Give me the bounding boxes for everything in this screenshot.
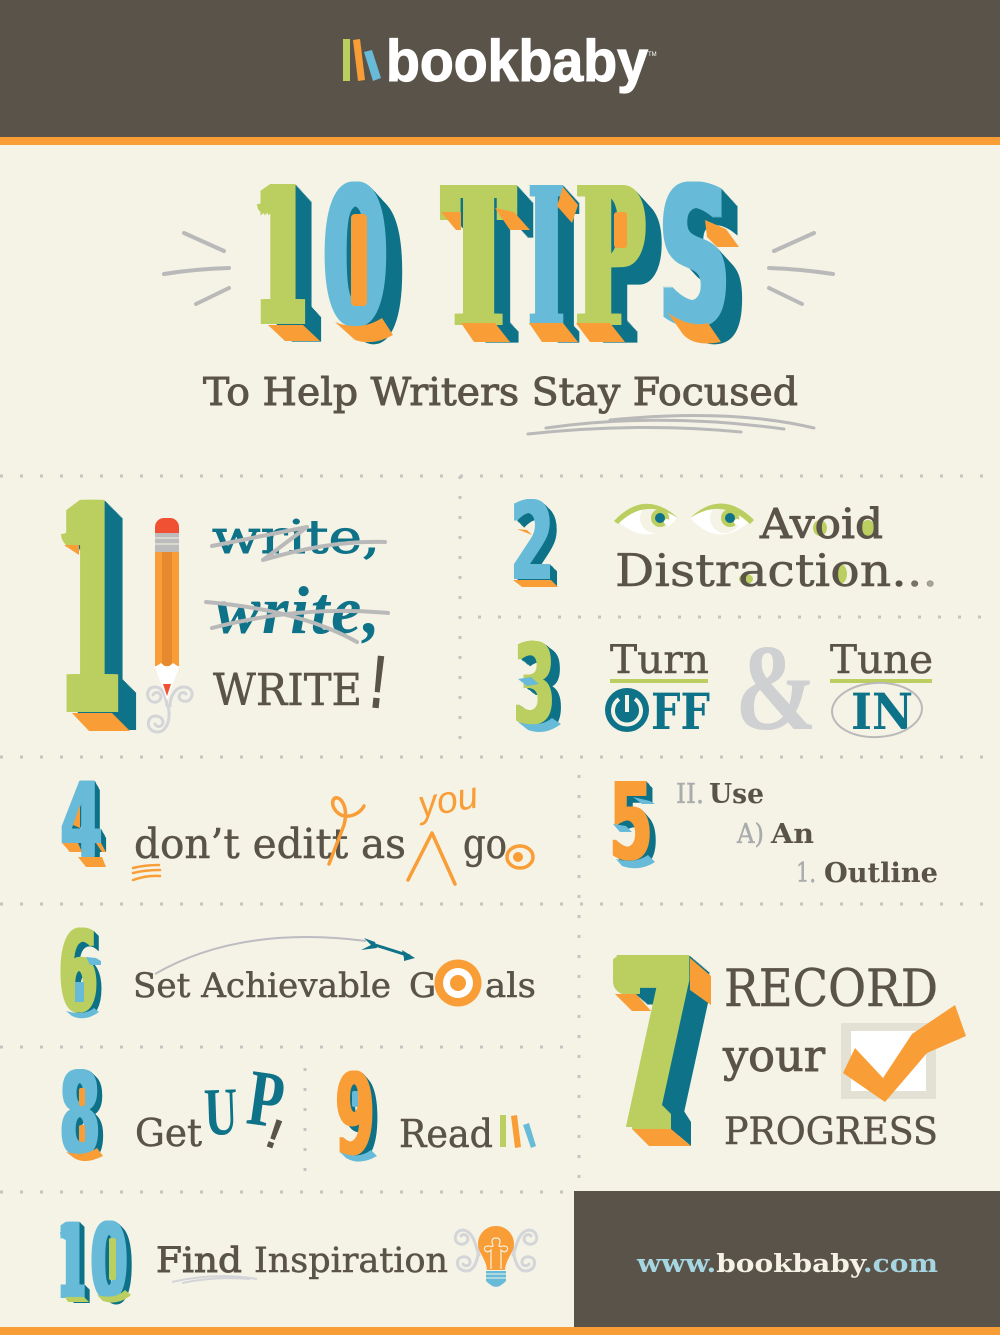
text: II. Use A) An 1. Outline: 1. xyxy=(796,858,816,889)
numeral 8 orange faces xyxy=(58,1068,108,1162)
title: 10 TIPS: P xyxy=(572,146,637,370)
numeral 10 xyxy=(56,1217,136,1307)
text: Inspiration: Inspiration xyxy=(254,1241,448,1281)
text: II. Use A) An 1. Outline: An xyxy=(770,819,814,850)
icon: checkbox with check xyxy=(840,1003,968,1103)
burst lines right of title xyxy=(767,230,835,306)
icon: target xyxy=(434,960,482,1006)
footer panel xyxy=(574,1191,1000,1327)
numeral 1 flag and orange faces xyxy=(61,532,130,731)
numeral 6 blue faces xyxy=(66,957,101,1018)
header band xyxy=(0,0,1000,145)
text: Set Achievable Goals xyxy=(133,966,536,1006)
numeral 3: 3 xyxy=(512,621,554,750)
text: Turn: Turn xyxy=(610,638,709,683)
icon: arrow arc xyxy=(154,936,415,975)
title: 10 TIPS xyxy=(254,146,742,370)
text: Set Achievable Goals: G xyxy=(409,966,436,1006)
icon: books xyxy=(498,1112,538,1150)
numeral 4: 4 xyxy=(59,760,101,882)
numeral 7 xyxy=(610,954,714,1149)
burst lines left of title xyxy=(162,230,231,306)
edit marks xyxy=(133,798,533,884)
text: your: your xyxy=(722,1031,826,1082)
icon: eyes xyxy=(614,504,754,534)
text: UP!: ! xyxy=(260,1109,289,1158)
text: WRITE! xyxy=(212,639,390,726)
footer orange bar xyxy=(0,1327,1000,1335)
text: II. Use A) An 1. Outline: Use xyxy=(709,779,764,810)
text: UP!: U xyxy=(203,1073,239,1150)
text: Find xyxy=(154,1240,262,1286)
text: Tune: Tune xyxy=(830,638,933,683)
icon: power button xyxy=(605,688,649,732)
text: Find: Find xyxy=(156,1241,242,1281)
text: don't edit as you go: go xyxy=(463,820,507,868)
text: II. Use A) An 1. Outline: A) xyxy=(736,819,764,850)
text: PROGRESS: PROGRESS xyxy=(724,1110,938,1153)
text: OFF: FF xyxy=(651,682,710,741)
icon: light bulb with swirls xyxy=(455,1222,539,1288)
text: IN circled: IN xyxy=(851,682,913,741)
title: 10 TIPS: S xyxy=(656,146,725,370)
numeral 9 xyxy=(334,1070,382,1164)
text: Get: Get xyxy=(135,1111,202,1155)
subtitle underline scribble xyxy=(526,414,816,436)
numeral 8: 8 xyxy=(58,1048,98,1180)
ampersand: & xyxy=(735,621,817,757)
text: Set Achievable Goals: als xyxy=(485,966,536,1006)
title: 10 TIPS: I xyxy=(527,146,554,370)
subtitle: To Help Writers Stay Focused xyxy=(203,370,798,414)
numeral 10 green faces xyxy=(56,1217,136,1307)
text: WRITE!: WRITE xyxy=(213,665,362,716)
numeral 1: 1 xyxy=(57,442,114,781)
title: 10 TIPS: 1 xyxy=(254,146,294,370)
text: WRITE!: ! xyxy=(366,639,390,726)
logo: bookbaby: bookbaby xyxy=(386,29,648,94)
title flag on the 1 xyxy=(257,204,264,213)
text: UP! xyxy=(205,1072,285,1147)
numeral 2: 2 xyxy=(509,480,553,605)
text: UP!: P xyxy=(242,1054,290,1146)
numeral 7: 7 xyxy=(609,908,688,1183)
text: write, (italic struck out): write, xyxy=(215,572,380,648)
numeral 9 blue faces xyxy=(334,1070,382,1164)
text: II. Use A) An 1. Outline: II. xyxy=(676,779,704,810)
numeral 9: 9 xyxy=(334,1051,373,1181)
text: write, (typewriter struck out): write, xyxy=(212,510,380,564)
text: Set Achievable Goals: Set Achievable xyxy=(133,966,391,1006)
numeral 5 blue faces xyxy=(613,797,655,868)
text: don't edit as you go: you xyxy=(412,775,481,827)
numeral 8 xyxy=(58,1068,108,1162)
text: Avoid: Avoid xyxy=(759,500,883,548)
title orange faces xyxy=(268,187,739,344)
title: 10 TIPS: T xyxy=(439,146,503,370)
text: Distraction...: Distraction. .. xyxy=(615,544,938,597)
text: RECORD: RECORD xyxy=(724,960,938,1019)
icon: pencil xyxy=(146,518,194,734)
title: 10 TIPS: 0 xyxy=(320,146,387,370)
text: don't edit as you go xyxy=(132,775,535,886)
numeral 4 orange faces xyxy=(62,805,106,867)
website url: www. bookbaby .com xyxy=(636,1249,938,1278)
numeral 5: 5 xyxy=(608,761,651,885)
numeral 3 blue faces xyxy=(518,677,561,732)
text: II. Use A) An 1. Outline xyxy=(676,779,938,889)
numeral 10: 1 xyxy=(57,1201,79,1323)
numeral 7 serif, foot and orange faces xyxy=(610,954,714,1149)
text: II. Use A) An 1. Outline: Outline xyxy=(824,858,938,889)
numeral 10: 0 xyxy=(89,1201,126,1323)
text: don't edit as you go: don’t editt as xyxy=(134,820,406,868)
numeral 6: 6 xyxy=(57,908,96,1038)
logo: bookbaby: TM xyxy=(648,52,657,58)
dotted dividers xyxy=(0,474,983,1194)
numeral 2 orange faces xyxy=(513,529,558,587)
text: Read: Read xyxy=(399,1112,493,1156)
